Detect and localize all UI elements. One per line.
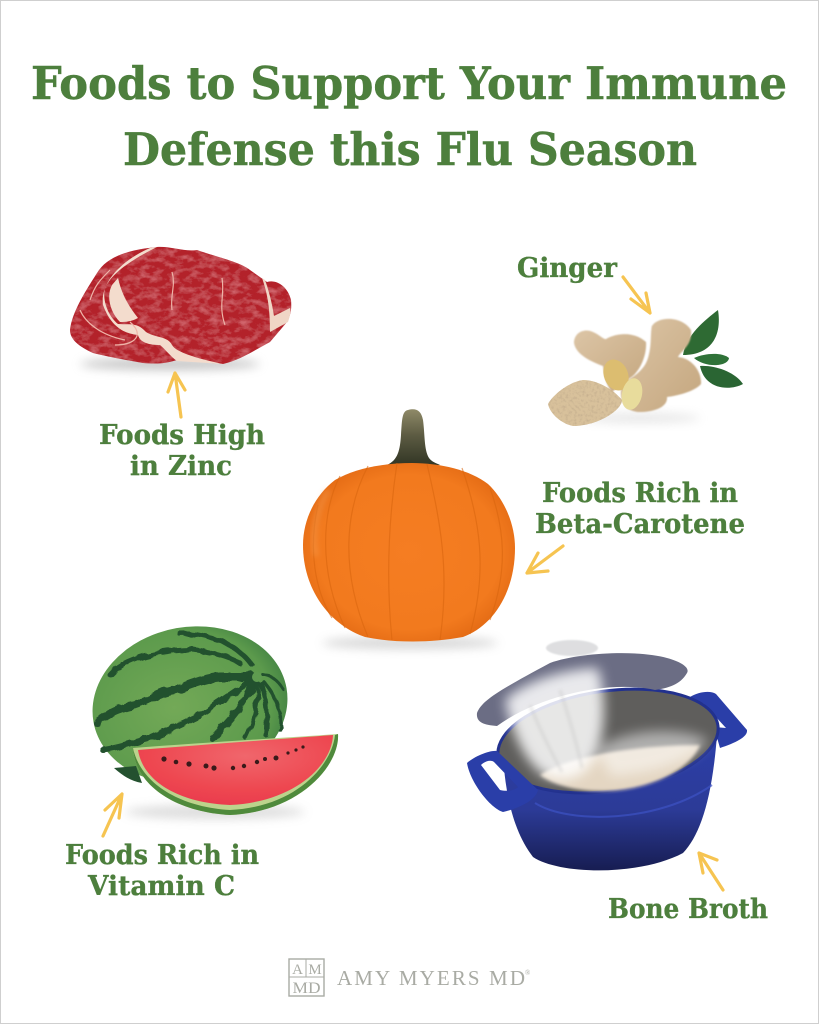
arrow: pumpkin — [527, 546, 563, 573]
arrow: watermelon — [103, 794, 122, 836]
pumpkin body — [303, 463, 515, 642]
title — [31, 57, 787, 176]
title: Foods to Support Your Immune — [31, 57, 787, 110]
ginger powder — [548, 380, 622, 426]
ginger leaves — [683, 310, 743, 388]
logo wordmark: AMY MYERS MD — [337, 966, 525, 990]
label: bone broth: Bone Broth — [608, 894, 768, 925]
broth — [540, 745, 700, 791]
pot left handle — [467, 751, 538, 812]
label: foods high in zinc: in Zinc — [130, 451, 232, 482]
label: foods rich in vitamin c: Foods Rich in — [65, 840, 259, 871]
watermelon whole — [80, 611, 300, 799]
food: ginger root — [548, 310, 743, 426]
food: pumpkin — [303, 409, 515, 649]
ginger cut faces — [599, 356, 633, 394]
lid knob — [546, 640, 598, 656]
watermelon lower stripe — [114, 766, 142, 783]
food: bone broth pot — [467, 640, 747, 870]
registered mark: ® — [525, 969, 531, 977]
ginger rhizomes — [574, 319, 701, 412]
food: steak — [70, 247, 291, 370]
watermelon seeds — [161, 745, 305, 771]
arrow: ginger — [623, 277, 650, 313]
label: foods rich in vitamin c: Vitamin C — [87, 871, 235, 902]
steam — [505, 668, 708, 779]
arrow: pot — [699, 853, 723, 890]
logo mark: MD — [292, 980, 320, 997]
steak fat — [103, 247, 223, 364]
label: ginger: Ginger — [517, 253, 618, 284]
label: foods rich in beta-carotene: Beta-Carotene — [535, 509, 745, 540]
pot right handle — [690, 692, 747, 748]
watermelon slice — [133, 734, 338, 815]
title: Defense this Flu Season — [123, 123, 697, 176]
label: foods rich in beta-carotene — [535, 478, 745, 540]
logo mark: A — [292, 962, 303, 978]
pot interior — [491, 676, 725, 806]
arrow: steak — [168, 373, 185, 417]
label: foods high in zinc: Foods High — [99, 420, 265, 451]
food: watermelon — [80, 611, 338, 819]
pumpkin stem — [387, 409, 440, 467]
logo mark — [289, 959, 324, 997]
logo: Amy Myers MD — [289, 959, 531, 997]
pot lid — [477, 653, 688, 726]
watermelon stripes — [97, 634, 284, 750]
label: foods rich in vitamin c — [65, 840, 259, 902]
logo mark: M — [308, 962, 322, 978]
pot body — [503, 735, 717, 870]
label: foods high in zinc — [99, 420, 265, 482]
steak meat — [70, 247, 291, 364]
label: foods rich in beta-carotene: Foods Rich in — [542, 478, 738, 509]
